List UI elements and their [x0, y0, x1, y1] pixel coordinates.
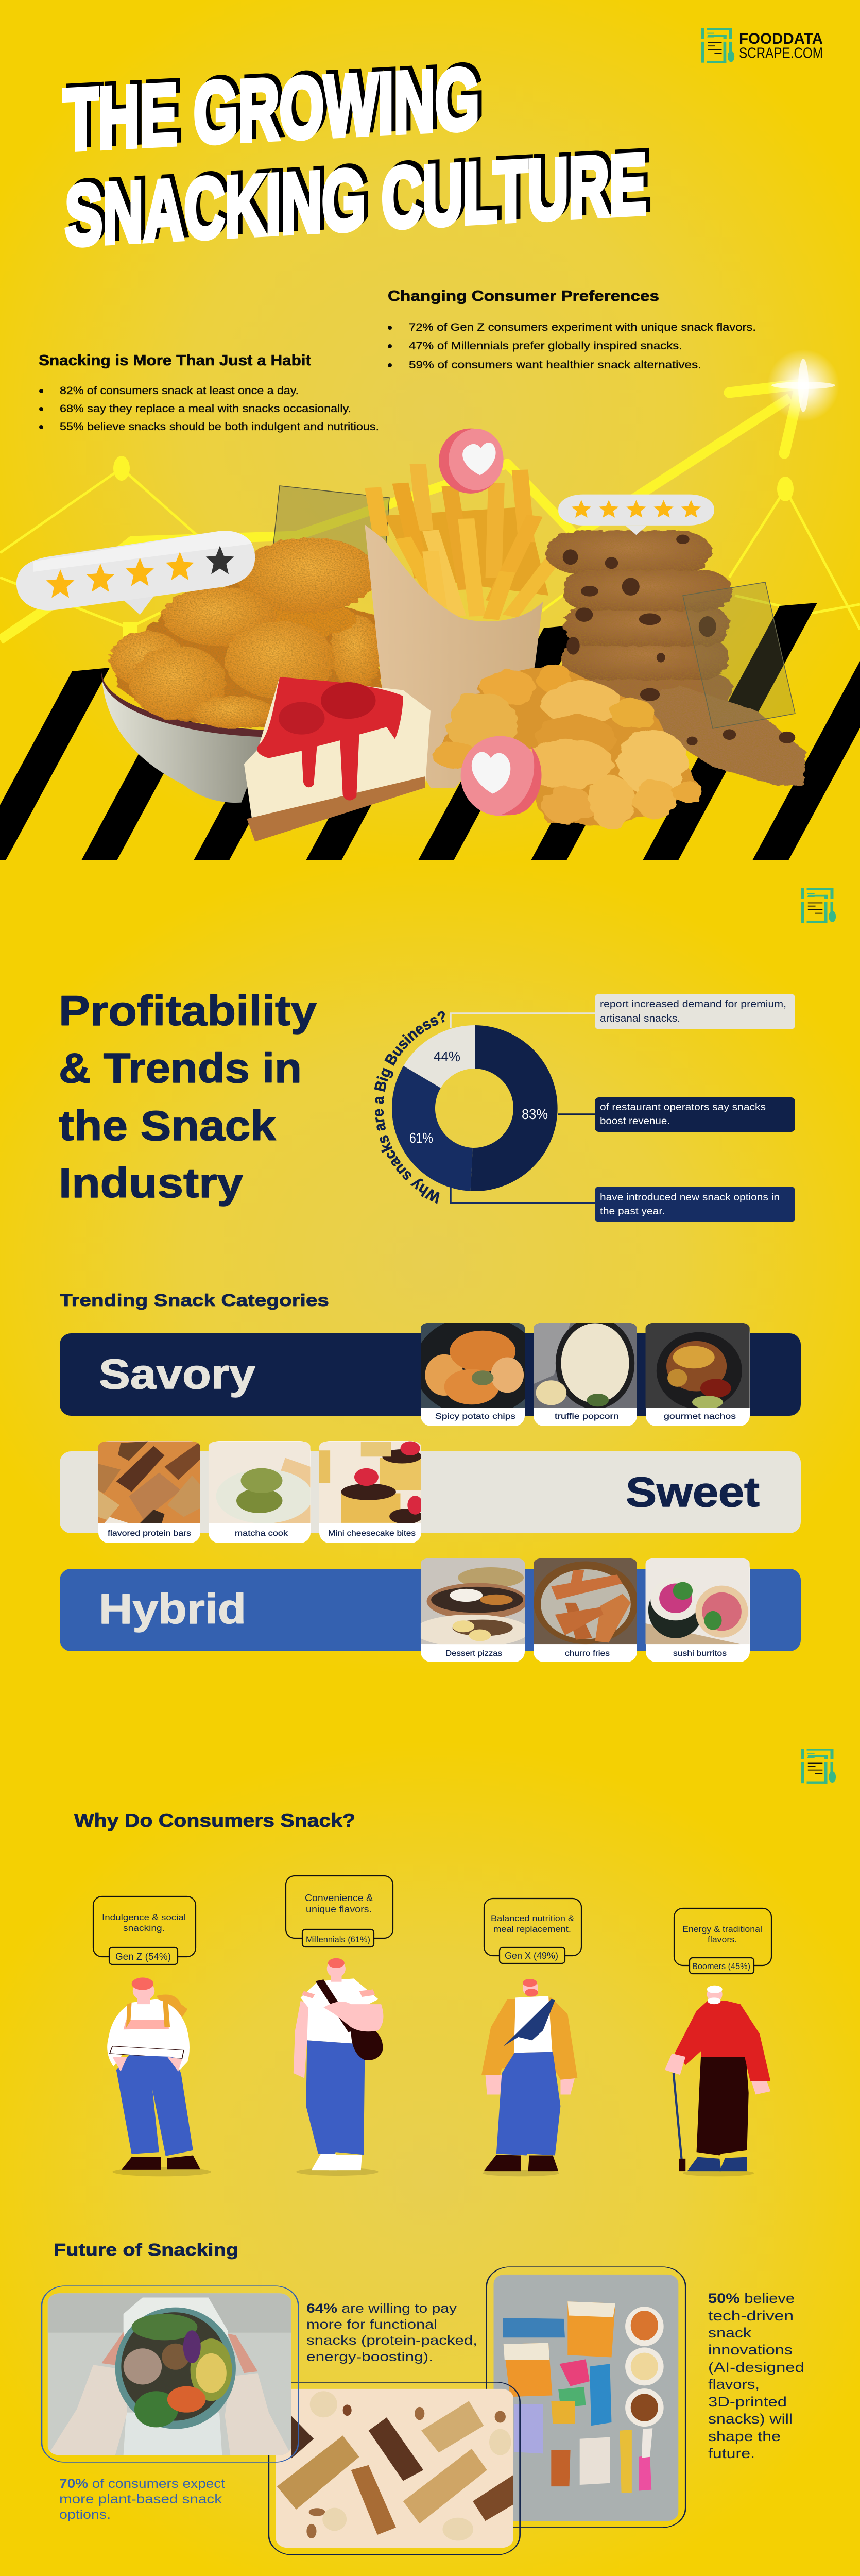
panel: sweet: flavored protein bars — [108, 1529, 191, 1538]
food collage — [16, 429, 806, 841]
panel: savory — [60, 1316, 801, 1426]
black hazard stripes — [0, 603, 860, 860]
callout: gen z — [93, 1896, 196, 1964]
curved donut title: Why snacks are a Big Business? — [374, 1011, 445, 1204]
text block: 64 percent: more for functional — [306, 2317, 437, 2332]
title: THE GROWING — [67, 46, 484, 164]
callout: premium — [595, 994, 795, 1029]
text block: 70 percent: 70% of consumers expect — [59, 2477, 225, 2491]
title — [63, 46, 651, 264]
glass panel left — [271, 486, 389, 578]
photo: granola bars — [269, 2382, 520, 2555]
photo collage: future of snacking — [42, 2267, 685, 2555]
bowl of nuggets — [101, 523, 404, 803]
text block: 50 percent: 3D-printed — [708, 2394, 787, 2410]
panel: hybrid: churro fries — [565, 1649, 610, 1658]
text block: 50 percent: shape the — [708, 2429, 781, 2444]
heading: profitability: Profitability — [59, 988, 317, 1035]
small logo section two — [801, 888, 836, 923]
callout: premium: report increased demand for premium, — [600, 999, 786, 1010]
logo top right: FOODDATA — [739, 30, 823, 47]
fries and cup — [365, 464, 559, 788]
text block: 64 percent: 64% are willing to pay — [306, 2301, 457, 2316]
callout: gen x: Gen X (49%) — [505, 1951, 558, 1961]
small logo section three — [801, 1749, 836, 1784]
donut chart: 44% — [434, 1048, 460, 1064]
callout: boomers: Energy & traditional — [682, 1924, 762, 1934]
callout: gen x: meal replacement. — [493, 1924, 571, 1934]
text block: changing consumer preferences — [388, 288, 756, 371]
arrow tip glow — [767, 349, 839, 421]
callout: millennials: Convenience & — [305, 1893, 373, 1903]
panel: sweet: Sweet — [626, 1469, 760, 1516]
panel: hybrid: Dessert pizzas — [445, 1649, 502, 1658]
callout: boomers — [674, 1908, 771, 1974]
callout: new options — [595, 1187, 795, 1222]
callout: boomers: flavors. — [708, 1935, 737, 1944]
text block: 50 percent: snack — [708, 2325, 752, 2341]
text block: 64 percent: energy-boosting). — [306, 2350, 433, 2364]
heading: profitability: the Snack — [59, 1103, 276, 1149]
photo: buddha bowl — [42, 2286, 298, 2462]
text block: 50 percent: future. — [708, 2446, 755, 2461]
person: gen x — [481, 1979, 577, 2176]
callout: revenue: boost revenue. — [600, 1116, 670, 1127]
text block: snacking is more than just a habit: 55% believe snacks should be both indulgent and nutritious. — [60, 421, 379, 433]
heading: trending snack categories: Trending Snack Categories — [60, 1291, 329, 1310]
heading: profitability — [59, 988, 317, 1207]
heart badge bottom — [461, 736, 542, 816]
panel: savory: truffle popcorn — [555, 1412, 619, 1421]
callout: gen x — [484, 1899, 581, 1963]
text block: 70 percent — [59, 2477, 225, 2522]
callout: new options: the past year. — [600, 1206, 665, 1217]
callout: gen x: Balanced nutrition & — [491, 1913, 575, 1923]
heading: profitability: Industry — [59, 1160, 243, 1207]
text block: snacking is more than just a habit: Snacking is More Than Just a Habit — [39, 352, 311, 369]
panel: savory: gourmet nachos — [664, 1412, 736, 1421]
callout: millennials: unique flavors. — [306, 1904, 372, 1914]
panel: savory: Spicy potato chips — [435, 1412, 515, 1421]
donut chart: 61% — [409, 1130, 433, 1146]
rating bubble left — [16, 531, 255, 615]
callout: millennials — [286, 1876, 393, 1947]
callout: revenue: of restaurant operators say snacks — [600, 1102, 766, 1113]
text block: 50 percent: flavors, — [708, 2377, 760, 2392]
connector lines — [451, 1013, 595, 1203]
panel: hybrid — [60, 1558, 801, 1662]
logo top right: SCRAPE.COM — [739, 45, 823, 62]
callout: gen z: snacking. — [123, 1923, 165, 1933]
text block: 64 percent: snacks (protein-packed, — [306, 2333, 477, 2348]
text block: changing consumer preferences: 59% of consumers want healthier snack alternatives. — [409, 359, 701, 371]
person: boomer — [665, 1986, 770, 2176]
text block: 50 percent — [708, 2291, 804, 2461]
glass panel right — [683, 582, 795, 728]
callout: revenue — [595, 1097, 795, 1132]
text block: changing consumer preferences: 72% of Gen Z consumers experiment with unique snack flavors. — [409, 321, 756, 333]
text block: 50 percent: innovations — [708, 2342, 793, 2358]
panel: hybrid: sushi burritos — [673, 1649, 727, 1658]
donut chart — [392, 1025, 558, 1191]
text block: 64 percent — [306, 2301, 477, 2364]
cookie stack — [546, 531, 806, 786]
cheesecake — [244, 677, 431, 841]
callout: millennials: Millennials (61%) — [306, 1935, 370, 1944]
logo top right — [701, 28, 823, 63]
text block: changing consumer preferences: 47% of Millennials prefer globally inspired snacks. — [409, 340, 682, 352]
heading: why do consumers snack: Why Do Consumers Snack? — [74, 1810, 355, 1831]
heading: profitability: & Trends in — [59, 1045, 302, 1092]
heart badge top — [439, 429, 504, 494]
donut chart: 83% — [522, 1106, 548, 1122]
rating bubble right — [558, 495, 714, 535]
callout: new options: have introduced new snack options in — [600, 1192, 780, 1203]
panel: hybrid: Hybrid — [99, 1586, 246, 1633]
panel: savory: Savory — [99, 1351, 255, 1398]
text block: snacking is more than just a habit: 82% of consumers snack at least once a day. — [60, 385, 299, 397]
text block: 50 percent: 50% believe — [708, 2291, 795, 2306]
text block: snacking is more than just a habit — [39, 352, 379, 433]
callout: gen z: Indulgence & social — [102, 1912, 186, 1922]
chips — [433, 664, 703, 829]
person: millennial — [294, 1958, 383, 2176]
callout: gen z: Gen Z (54%) — [115, 1952, 171, 1962]
text block: snacking is more than just a habit: 68% say they replace a meal with snacks occasionally. — [60, 403, 351, 415]
text block: 70 percent: options. — [59, 2507, 111, 2522]
person: gen z — [107, 1977, 211, 2176]
people illustrations — [107, 1958, 770, 2176]
panel: sweet: Mini cheesecake bites — [328, 1529, 416, 1538]
text block: changing consumer preferences: Changing Consumer Preferences — [388, 288, 659, 304]
panel: sweet: matcha cook — [235, 1529, 288, 1538]
chart lines and arrow behind food — [0, 384, 860, 640]
callout: boomers: Boomers (45%) — [692, 1961, 750, 1971]
heading: future of snacking: Future of Snacking — [54, 2240, 238, 2259]
panel: sweet — [60, 1441, 801, 1543]
text block: 50 percent: tech-driven — [708, 2308, 794, 2324]
text block: 50 percent: snacks) will — [708, 2411, 793, 2427]
title: THE GROWING — [63, 50, 479, 168]
photo: snack packs — [487, 2267, 685, 2528]
text block: 70 percent: more plant-based snack — [59, 2492, 222, 2506]
text block: 50 percent: (AI-designed — [708, 2360, 804, 2375]
callout: premium: artisanal snacks. — [600, 1013, 680, 1024]
